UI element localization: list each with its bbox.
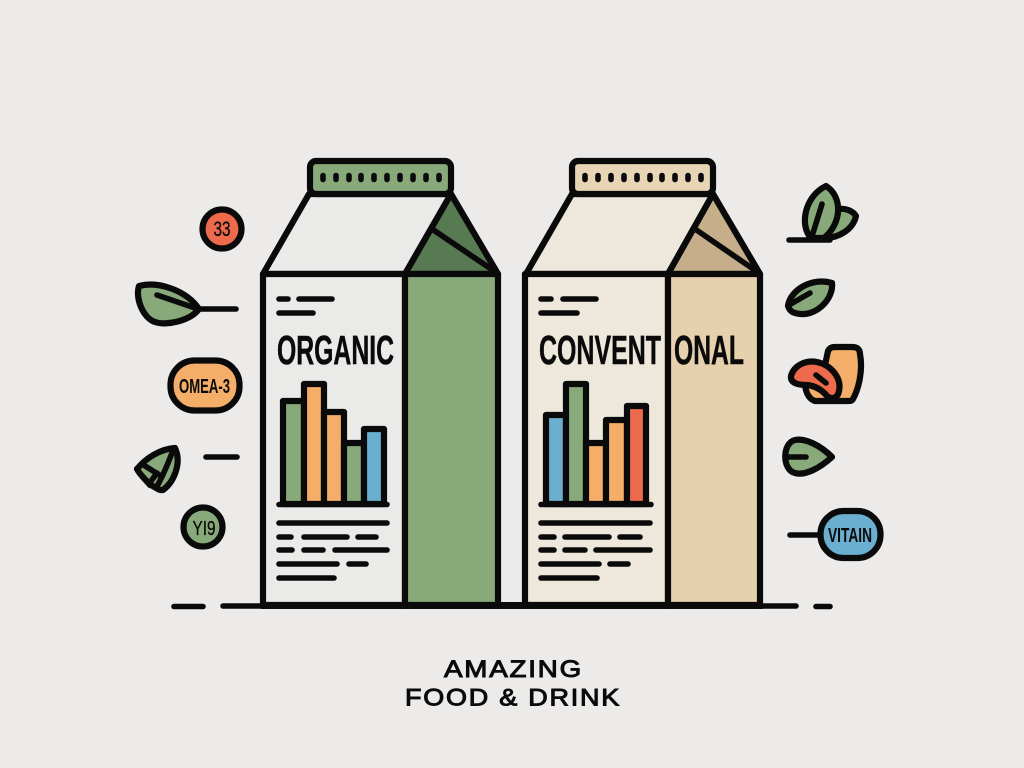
body text lines: conventional [541,523,650,578]
carton gusset: conventional [668,194,760,274]
panel: conventional carton [525,161,760,605]
label header lines: organic [279,299,332,313]
badge: OMEGA-3 [170,360,240,410]
carton roof: conventional [526,194,713,274]
heading: CONVENTIONAL: ONAL [674,327,744,373]
title [405,656,621,712]
icon: small veined leaf [137,448,178,490]
label header lines: conventional [541,299,596,313]
icon: double leaf sprig [789,186,856,240]
icon: orange and red food [791,347,861,401]
carton cap: conventional [572,161,713,194]
badge: YI9 [184,508,222,546]
icon: leaf with stem [138,285,236,323]
carton side face: organic [405,274,498,605]
badge: VITAIN with connector: VITAIN [828,525,872,547]
title: AMAZING [444,656,583,683]
badge: VITAIN with connector [790,511,880,558]
body text lines: organic [279,523,387,578]
carton cap: organic [310,161,451,194]
badge: YI9: YI9 [192,518,216,540]
icon: 33 badge: 33 [214,218,230,241]
title: FOOD & DRINK [405,684,621,712]
carton front face: conventional [525,274,668,605]
carton gusset: organic [405,194,498,274]
badge: OMEGA-3: OMEA-3 [179,376,230,398]
dash connector [206,454,237,460]
baseline ground line [174,601,830,609]
carton side face: conventional [668,274,760,605]
heading: ORGANIC: ORGANIC [277,327,394,373]
icon: leaf right lower [785,440,832,474]
icon: leaf right upper [788,282,832,314]
bar chart: conventional [541,384,651,504]
heading: CONVENTIONAL: CONVENT [539,327,661,373]
carton front face: organic [263,274,405,605]
carton roof: organic [263,194,451,274]
icon: 33 badge [202,210,242,248]
panel: organic carton [263,161,498,605]
bar chart: organic [279,384,387,504]
